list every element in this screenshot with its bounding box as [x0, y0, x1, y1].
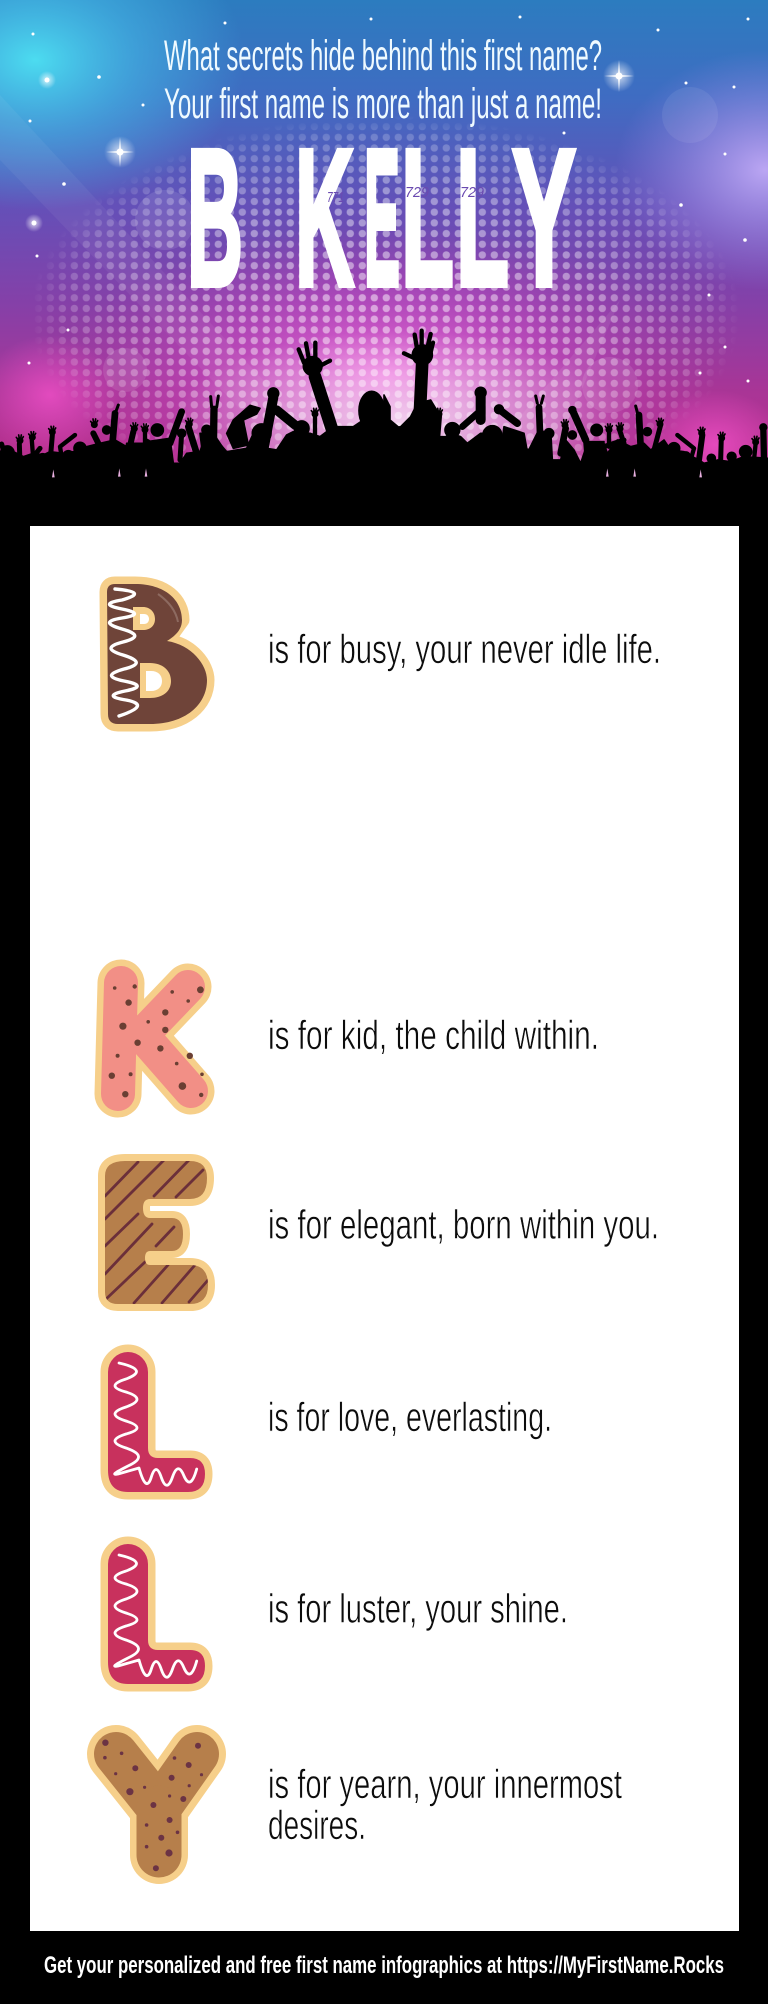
distressed number texture on title: 771 — [327, 189, 344, 206]
text: Y line: is for yearn, your innermost — [268, 1761, 622, 1807]
sparkles — [25, 16, 750, 382]
text: K line: is for kid, the child within. — [268, 1012, 599, 1058]
distressed number texture on title: 729 — [460, 184, 485, 201]
text: Y line: desires. — [268, 1802, 366, 1848]
title: B KELLY: E — [364, 109, 400, 327]
text: Y line — [268, 1761, 622, 1848]
distressed number texture on title: 729 — [405, 184, 430, 201]
cookie letter L — [108, 1352, 205, 1492]
heading tagline — [164, 32, 602, 128]
distressed number texture on title — [327, 184, 485, 206]
title: B KELLY: L — [401, 109, 454, 327]
cookie letter L second — [108, 1544, 205, 1684]
text: L line 1: is for love, everlasting. — [268, 1394, 552, 1440]
big raised hand left — [299, 343, 330, 375]
text: Y — [512, 109, 576, 327]
cookie letter E — [105, 1160, 208, 1304]
cookie letter K — [109, 983, 204, 1097]
LED dot grid — [38, 123, 732, 461]
cookie letter Y — [102, 1740, 203, 1871]
hero concert background — [0, 0, 768, 525]
cookie letter B — [107, 584, 207, 724]
title: B KELLY: K — [295, 109, 354, 327]
small gaps in crowd right — [606, 468, 702, 477]
big raised hand right — [404, 331, 433, 410]
white content panel — [30, 526, 739, 1931]
small gaps in crowd — [52, 468, 147, 477]
crowd left half — [0, 343, 384, 510]
text: L line 2: is for luster, your shine. — [268, 1586, 568, 1632]
crowd silhouette — [0, 331, 768, 528]
crowd right half — [384, 331, 768, 510]
title: B KELLY: L — [456, 109, 509, 327]
title: B KELLY: B — [187, 109, 243, 327]
